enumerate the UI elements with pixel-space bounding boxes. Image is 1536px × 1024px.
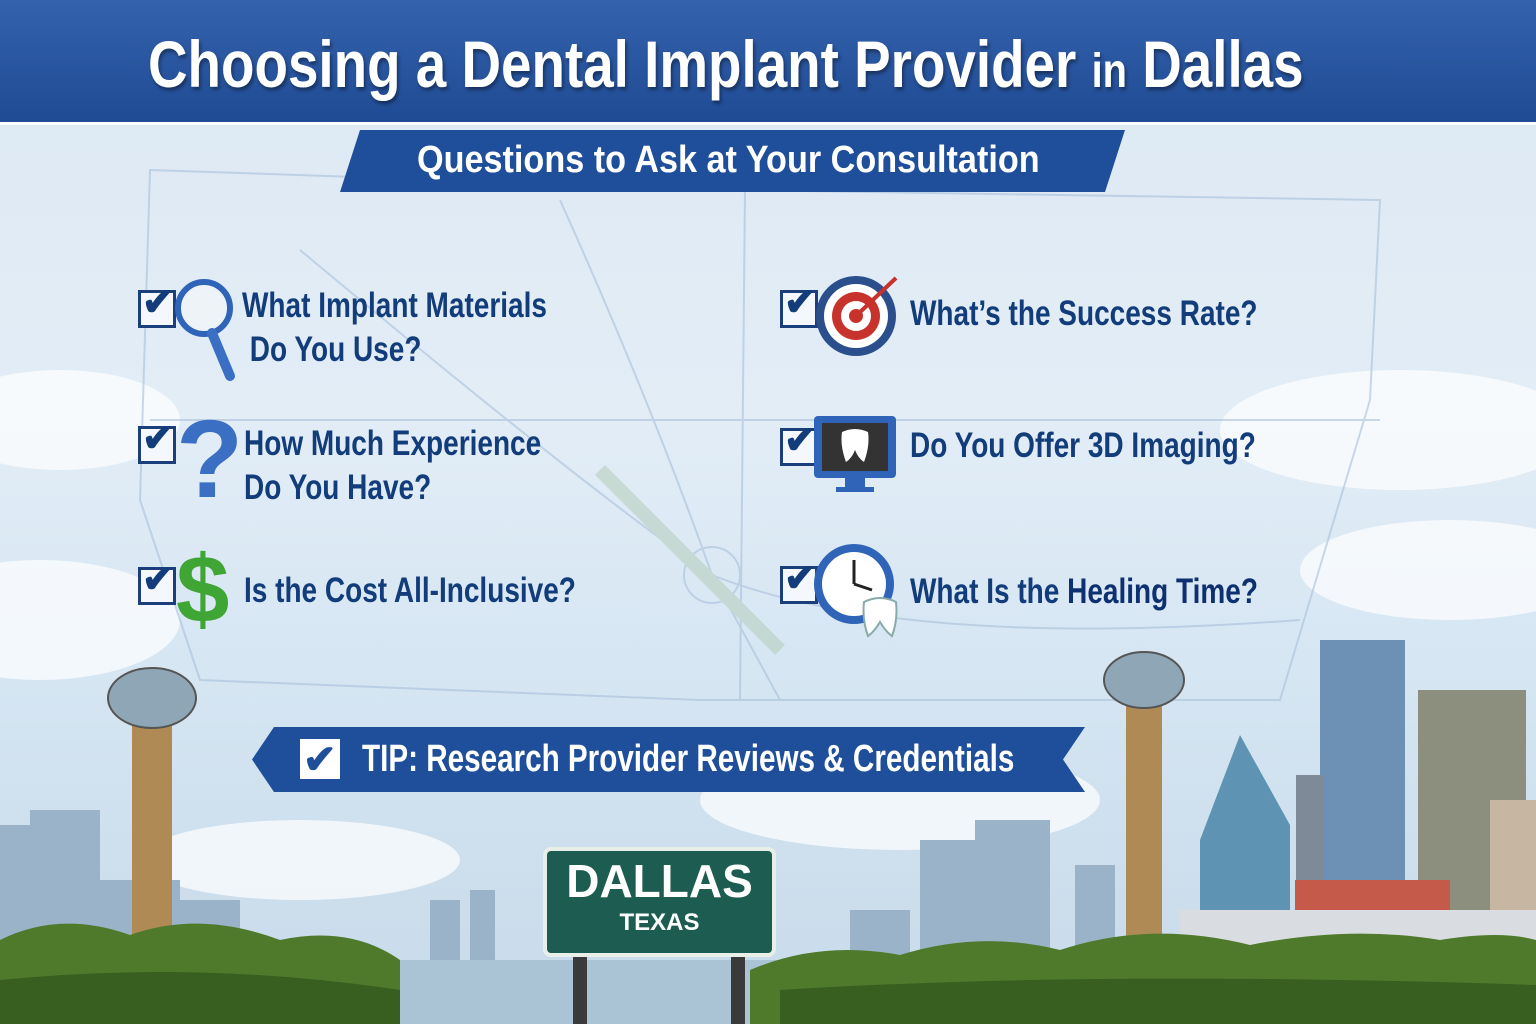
- Dallas sign: [543, 847, 776, 1024]
- icon: target: [816, 276, 898, 356]
- question: experience: Do You Have?: [244, 468, 431, 507]
- skyline: [0, 640, 1536, 1024]
- Dallas sign: DALLAS: [566, 855, 753, 907]
- icon: dollar: $: [176, 536, 229, 643]
- question: 3D imaging: ✔: [784, 420, 816, 462]
- subtitle ribbon: Questions to Ask at Your Consultation: [417, 139, 1040, 181]
- question: materials: What Implant Materials: [242, 286, 547, 325]
- question: 3D imaging: [780, 416, 1256, 492]
- header band: [0, 0, 1536, 125]
- question: 3D imaging: Do You Offer 3D Imaging?: [910, 426, 1256, 465]
- question: healing: ✔: [784, 558, 816, 600]
- question: success: [780, 276, 1258, 356]
- question: healing: [780, 544, 1258, 638]
- question: healing: What Is the Healing Time?: [910, 572, 1258, 611]
- question: success: ✔: [784, 282, 816, 324]
- question: materials: [138, 279, 547, 381]
- question: experience: ✔: [142, 418, 174, 460]
- question: cost: ✔: [142, 559, 174, 601]
- icon: clock and tooth: [814, 544, 898, 638]
- icon: magnifier: [175, 279, 235, 381]
- tip banner: TIP: Research Provider Reviews & Credentials: [362, 738, 1014, 780]
- icon: monitor: [814, 416, 896, 492]
- icon: question mark: ?: [176, 398, 243, 521]
- icon: check box: ✔: [303, 738, 337, 782]
- question: cost: [138, 536, 576, 643]
- question: experience: [138, 398, 541, 521]
- Dallas sign: TEXAS: [619, 909, 700, 936]
- question: cost: Is the Cost All-Inclusive?: [244, 571, 576, 610]
- question: experience: How Much Experience: [244, 424, 541, 463]
- tip banner: [252, 727, 1085, 792]
- question: materials: Do You Use?: [250, 330, 421, 369]
- title: Choosing a Dental Implant Provider in Dallas: [148, 27, 1304, 101]
- question: success: What’s the Success Rate?: [910, 294, 1258, 333]
- subtitle ribbon: [340, 130, 1125, 192]
- question: materials: ✔: [142, 282, 174, 324]
